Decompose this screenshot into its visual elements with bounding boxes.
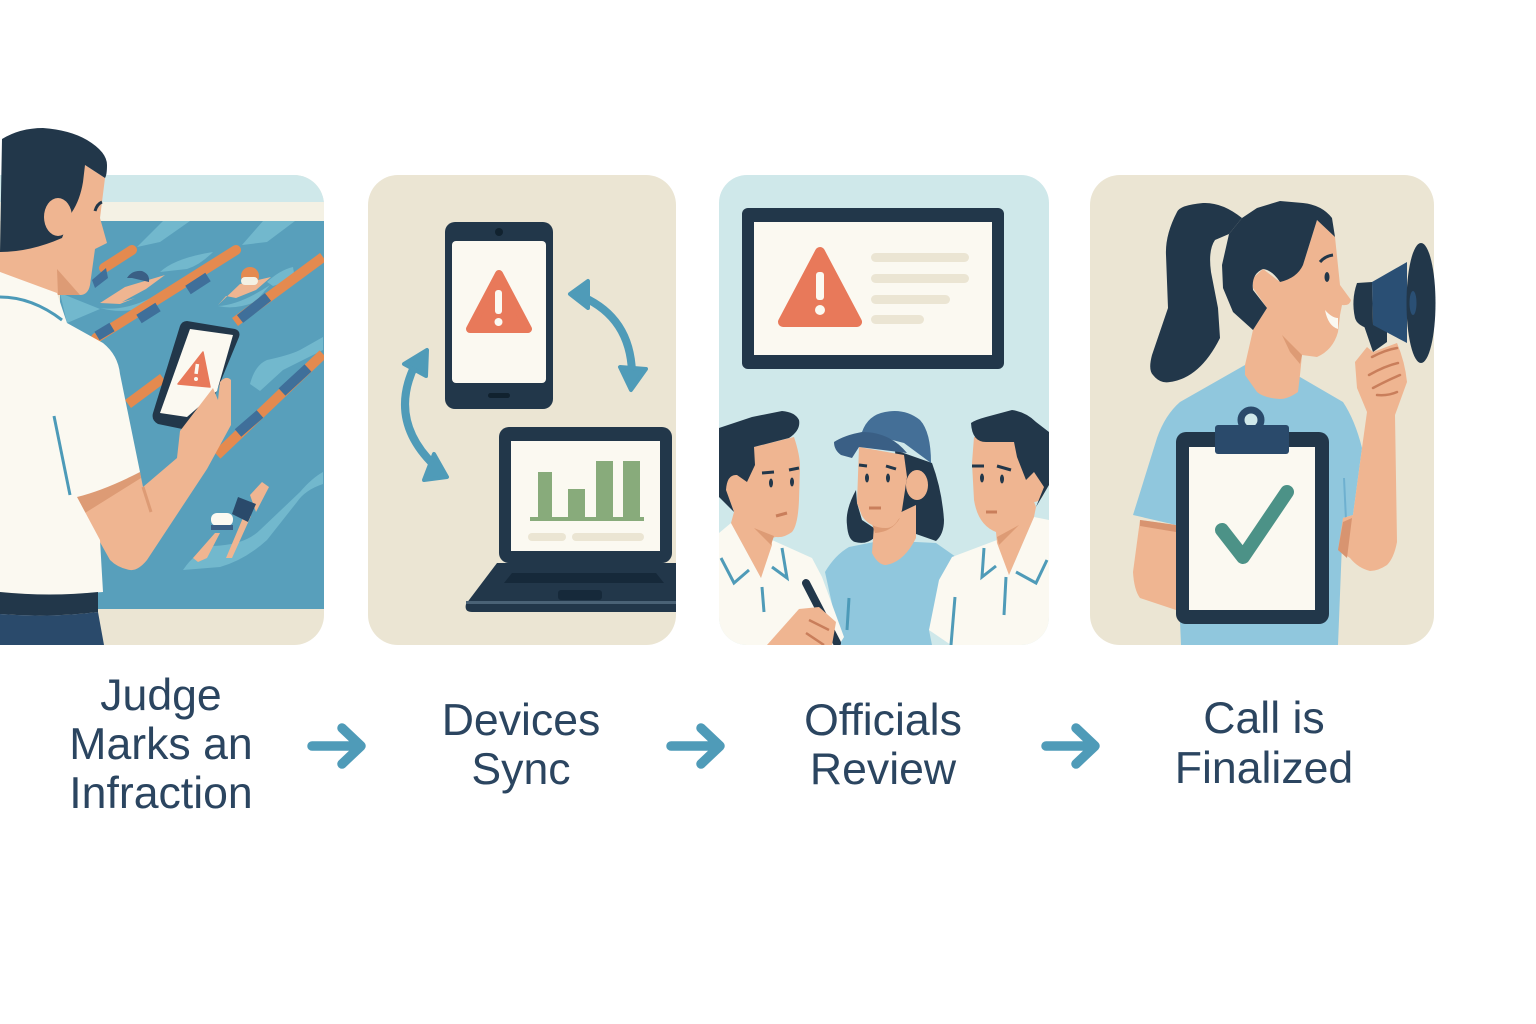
clipboard	[1176, 410, 1329, 624]
head and neck	[0, 165, 107, 295]
judge figure	[0, 128, 231, 645]
arrow 2	[671, 728, 720, 764]
megaphone	[1353, 243, 1436, 363]
left arm	[1133, 520, 1176, 610]
head and neck	[1245, 220, 1351, 399]
official centre with cap	[825, 411, 956, 645]
panel: call is finalized	[1090, 175, 1436, 645]
official left	[719, 411, 844, 645]
swimmers	[100, 275, 165, 304]
label: judge marks an infraction: Marks an	[69, 720, 253, 769]
wall monitor	[742, 208, 1004, 369]
panel: judge marks an infraction	[0, 128, 324, 645]
label: officials review: Officials	[804, 696, 962, 745]
label: call is finalized: Call is	[1203, 694, 1325, 743]
label: officials review: Review	[810, 745, 957, 794]
belt and trousers	[0, 592, 98, 616]
white shirt	[0, 272, 140, 596]
arrow 1	[312, 728, 361, 764]
raising arm	[1338, 343, 1407, 571]
swimming pool	[60, 221, 324, 609]
laptop with chart	[466, 427, 676, 612]
sync arrows	[404, 281, 646, 480]
official right	[929, 410, 1049, 645]
phone	[153, 321, 240, 431]
panel: officials review	[719, 175, 1049, 645]
label: devices sync: Devices	[442, 696, 600, 745]
label: judge marks an infraction: Judge	[100, 671, 222, 720]
arm and hand	[77, 378, 231, 570]
label: devices sync: Sync	[471, 745, 571, 794]
smartphone	[445, 222, 553, 409]
label: judge marks an infraction: Infraction	[69, 769, 253, 818]
ponytail	[1150, 203, 1242, 382]
lane ropes	[96, 250, 323, 455]
arrow 3	[1046, 728, 1095, 764]
t-shirt	[1133, 365, 1362, 645]
panel: devices sync	[368, 175, 676, 645]
label: call is finalized: Finalized	[1175, 744, 1353, 793]
